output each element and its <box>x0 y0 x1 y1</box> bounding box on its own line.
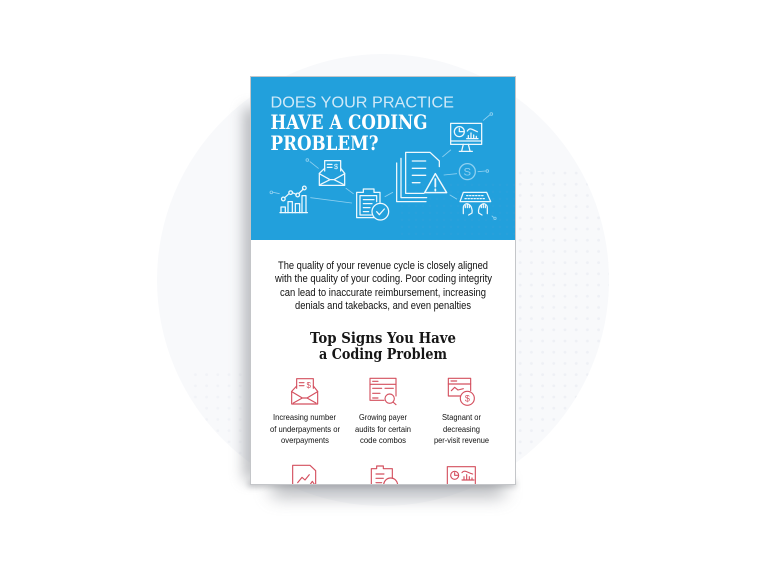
icon: envelope with invoice <box>292 379 318 404</box>
icon: browser with magnifier <box>370 378 396 405</box>
caption: per-visit revenue: Stagnant or <box>442 412 481 422</box>
caption: payer audits <box>355 412 411 445</box>
icon: monitor dashboard <box>447 467 475 485</box>
icon: envelope: $ <box>334 162 338 171</box>
infographic mockup scene <box>194 76 609 507</box>
caption: payer audits: Growing payer <box>359 412 407 422</box>
intro paragraph: denials and takebacks, and even penalties <box>295 300 471 312</box>
icon: browser with dollar coin: $ <box>465 394 470 404</box>
heading: top signs <box>310 330 456 363</box>
intro paragraph: with the quality of your coding. Poor coding integrity <box>274 273 493 285</box>
caption: underpayments: Increasing number <box>273 412 336 422</box>
caption: per-visit revenue: per-visit revenue <box>434 435 489 445</box>
connector lines <box>270 113 496 219</box>
icon: document with chart and warning <box>293 465 316 487</box>
title: bold lines: PROBLEM? <box>270 131 378 155</box>
red line icons <box>292 378 475 492</box>
icon: envelope with invoice: $ <box>306 381 311 390</box>
icon: clipboard with check <box>370 465 398 484</box>
title: bold lines <box>270 110 428 155</box>
icon: bar and line chart <box>280 186 307 213</box>
caption: per-visit revenue: decreasing <box>443 424 480 434</box>
caption: payer audits: code combos <box>360 435 406 445</box>
caption: underpayments <box>270 412 340 445</box>
page drop shadow <box>244 108 516 496</box>
caption: underpayments: of underpayments or <box>270 424 340 434</box>
captions <box>270 412 489 445</box>
icon: dollar coin <box>459 164 475 180</box>
panel: blue header <box>251 77 515 240</box>
icon: documents with warning <box>397 152 447 202</box>
icon: monitor dashboard <box>451 123 482 151</box>
intro paragraph <box>274 260 493 312</box>
title: light line: DOES YOUR PRACTICE <box>270 95 454 112</box>
caption: per-visit revenue <box>434 412 489 445</box>
intro paragraph: can lead to inaccurate reimbursement, increasing <box>280 287 486 299</box>
icon: keyboard with hands <box>460 192 491 215</box>
icon: envelope <box>319 161 345 185</box>
title: bold lines: HAVE A CODING <box>270 110 428 134</box>
heading: top signs: Top Signs You Have <box>310 330 456 347</box>
caption: underpayments: overpayments <box>281 435 329 445</box>
intro paragraph: The quality of your revenue cycle is closely aligned <box>278 260 488 272</box>
heading: top signs: a Coding Problem <box>319 346 448 363</box>
header line icons <box>270 113 496 220</box>
icon: browser with dollar coin <box>448 378 474 405</box>
background circle with dot pattern <box>194 172 609 454</box>
caption: payer audits: audits for certain <box>355 424 411 434</box>
infographic page <box>250 76 516 492</box>
icon: dollar coin: S <box>464 167 472 179</box>
icon: clipboard with check <box>357 189 389 220</box>
